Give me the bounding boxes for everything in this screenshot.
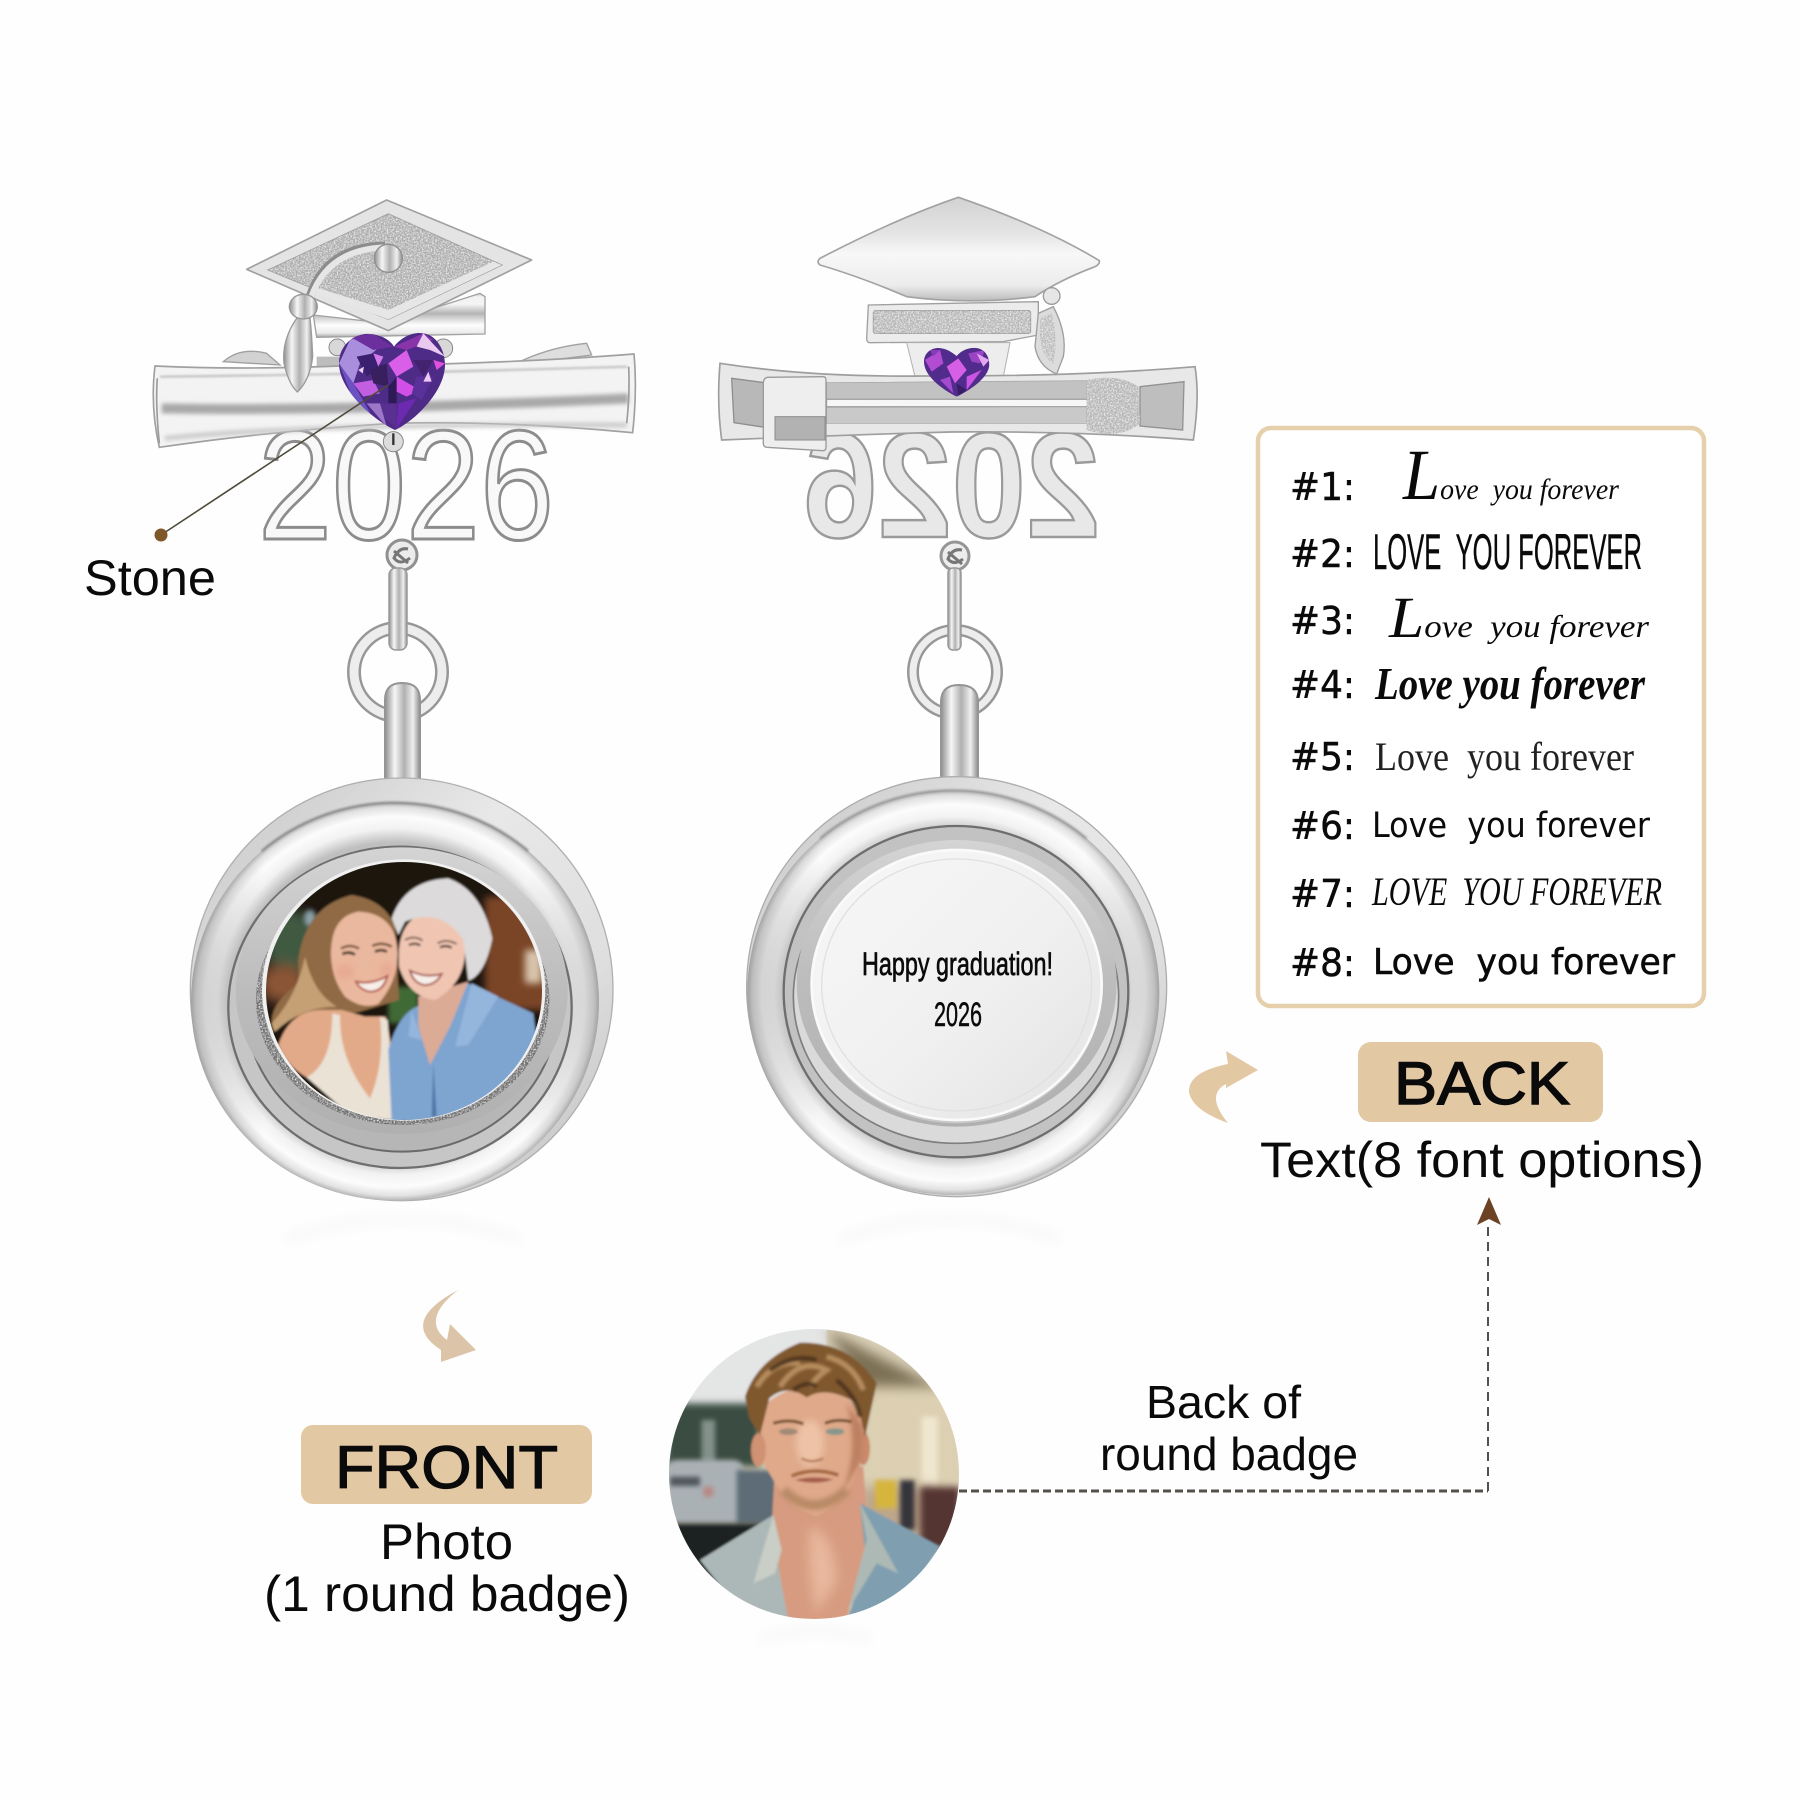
font row 4: #4: [1290,663,1355,707]
back round pendant with engraved text [747,777,1167,1197]
font row 1 [1290,435,1619,515]
font row 4 [1290,658,1646,709]
woman [272,895,399,1032]
engraving: Happy graduation!: Happy graduation! [862,946,1053,982]
font row 2 [1290,524,1642,580]
label: Photo (1 round badge): Photo [380,1514,513,1570]
scroll [153,354,635,447]
stone bezel [907,343,1010,377]
arrow: curved to front [423,1290,476,1362]
font row 6: Love you forever [1372,806,1651,846]
shirt [700,1515,788,1620]
font row 7: LOVE YOU FOREVER [1371,869,1662,914]
font row 3: #3: [1290,599,1355,643]
back ornaments [223,351,280,365]
label: Back of round badge: round badge [1100,1428,1358,1480]
grandmother [388,983,538,1122]
arrow: curved to back [1189,1051,1258,1123]
FRONT badge [301,1425,592,1504]
collar [867,302,1038,343]
hair [745,1343,877,1437]
round badge photo: young man [669,1329,959,1619]
font row 6 [1290,804,1651,848]
label: Text(8 font options): Text(8 font options) [1260,1132,1704,1188]
tassel [284,294,317,392]
front round pendant with photo [190,778,613,1201]
font row 1: #1: [1290,465,1355,509]
arrow: dashed connector from badge to back text [959,1197,1501,1491]
label: Back of round badge: Back of [1146,1376,1301,1428]
front pin hanging link and ring [354,540,442,795]
font row 5: #5: [1290,735,1355,779]
small heart stone [924,348,990,396]
neck and chest [772,1467,868,1620]
cap back [818,197,1099,301]
font row 3: Love you forever [1388,585,1650,650]
stone pointer line [164,385,388,533]
BACK badge [1358,1042,1603,1122]
heart birthstone [339,333,445,430]
BACK badge: BACK [1394,1050,1570,1117]
font row 2: #2: [1290,532,1355,576]
engraving: 2026: 2026 [934,996,982,1034]
graduation cap top [247,200,532,331]
year 2026 openwork: 2026 [258,399,554,573]
font row 5 [1290,734,1634,779]
font row 6: #6: [1290,804,1355,848]
pointer dot [154,528,168,542]
label: Photo (1 round badge): (1 round badge) [264,1566,630,1622]
font row 1: Love you forever [1402,435,1619,515]
face [757,1387,863,1516]
label: Stone: Stone [84,550,216,606]
font row 8: Love you forever [1373,942,1675,983]
font row 7: #7: [1290,872,1355,916]
FRONT badge: FRONT [335,1434,558,1501]
back of scroll [719,363,1197,451]
font row 4: Love you forever [1374,658,1646,709]
font row 8: #8: [1290,941,1355,985]
features [773,1420,852,1424]
back pin: cap, scroll, heart stone and mirrored 2026 [719,197,1197,569]
tassel back [1035,288,1064,374]
cap collar [313,293,485,337]
font row 5: Love you forever [1375,734,1634,779]
font row 3 [1290,585,1650,650]
front pin: cap, scroll, heart stone and 2026 [153,200,635,573]
label: Back of round badge [1100,1376,1358,1480]
mirrored year 2026: 2026 [803,401,1100,569]
photo: woman and grandmother [266,862,542,1120]
back pin hanging link and ring [913,542,997,782]
font row 7 [1290,869,1662,916]
label: Photo (1 round badge) [264,1514,630,1622]
soft reflections under pendants [285,1219,1060,1640]
prongs [329,339,346,356]
font options card [1258,428,1704,1006]
